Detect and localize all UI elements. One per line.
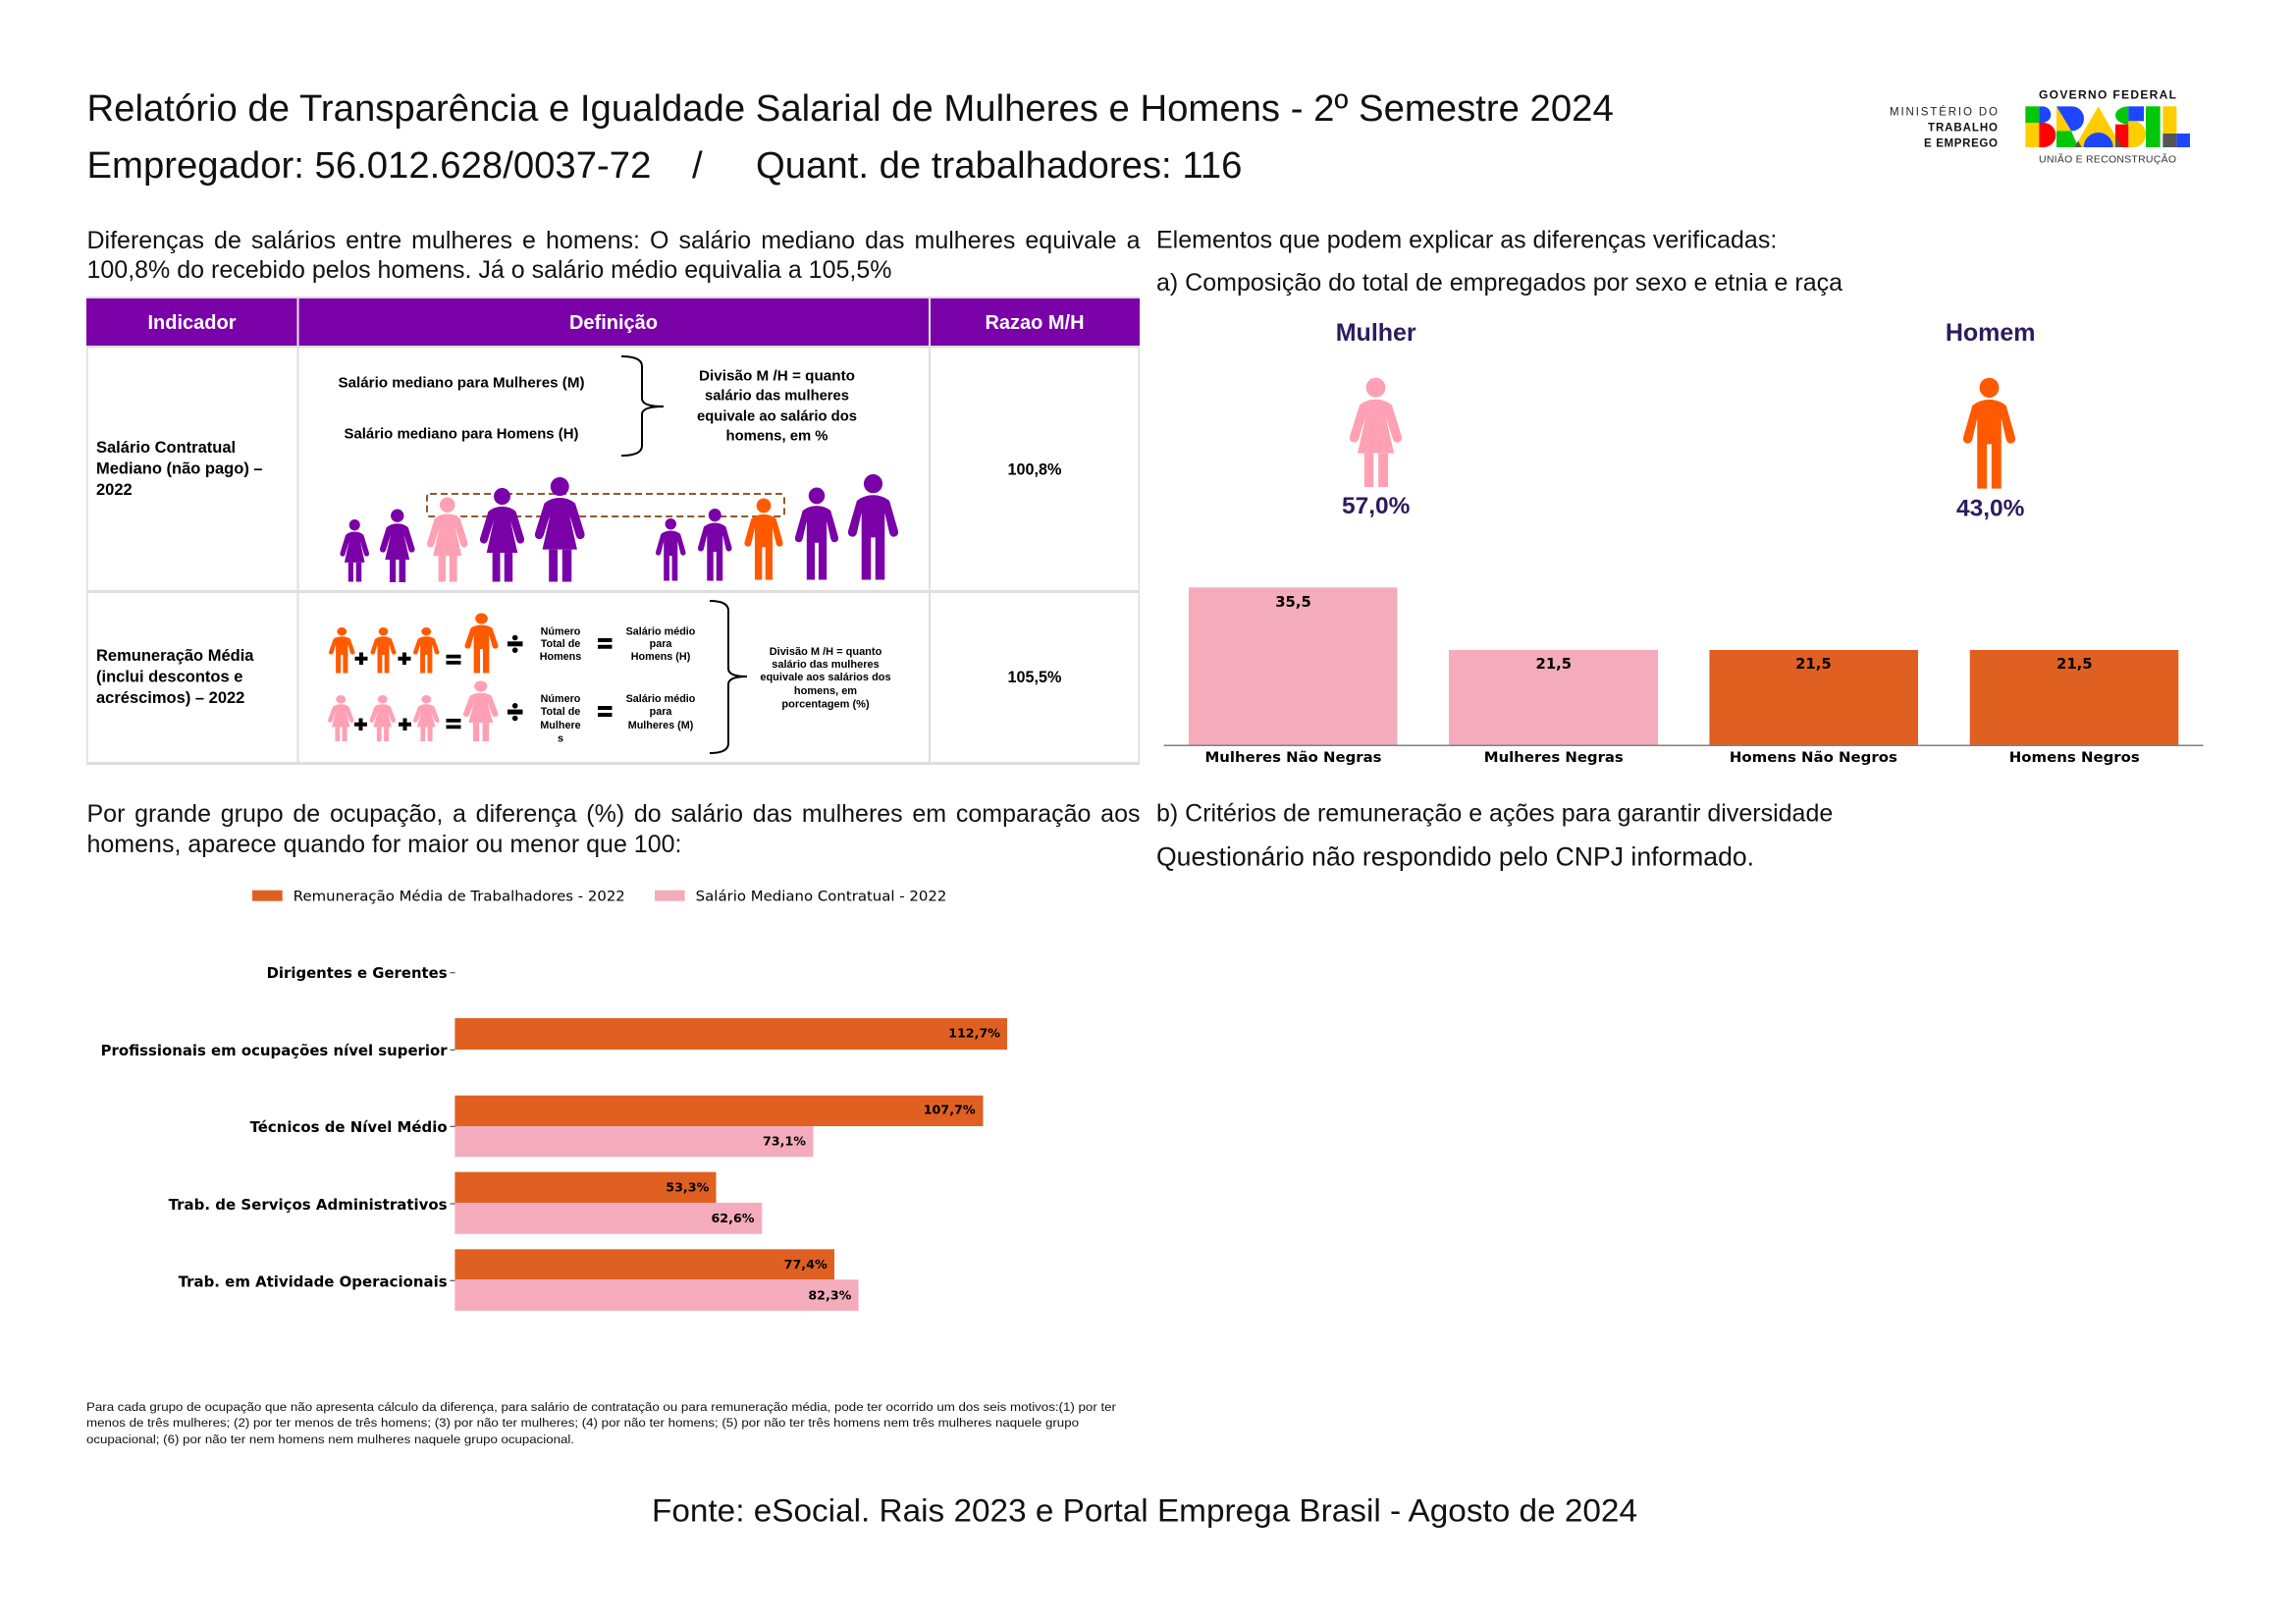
definition: salário mediano formula: Divisão M /H = quanto [699,367,855,385]
title: Empregador: 56.012.628/0037-72 [86,144,651,187]
title: Relatório de Transparência e Igualdade Salarial de Mulheres e Homens - 2º Semestre 2024 [86,87,1614,130]
bar category labels: Homens Negros [2009,750,2140,766]
heading: mulher: Mulher [1336,319,1416,347]
footnote [86,1400,1116,1446]
bar values: 73,1% [763,1134,806,1149]
heading: elementos explicativos: Elementos que podem explicar as diferenças verificadas: [1156,226,1777,253]
row label: salário contratual [96,439,263,499]
panel: indicator table [86,297,1140,765]
row label: salário contratual: 2022 [96,481,133,499]
row label: remuneração média [96,647,254,707]
logo mark: brasil [2025,106,2190,147]
chart legend: Remuneração Média de Trabalhadores - 2022 [294,890,625,905]
definition: salário mediano formula [338,356,857,456]
table header: Razao M/H [985,312,1085,334]
icon: homem [1963,378,2015,489]
definition: salário mediano formula: salário das mulheres [705,387,849,405]
bar values: 77,4% [784,1257,828,1271]
heading: elementos explicativos [1156,226,1842,297]
icons: men average formula: Homens [540,651,581,663]
value: razão remuneração média: 105,5% [1008,669,1061,686]
value: razão salário mediano: 100,8% [1008,461,1061,479]
definition: salário mediano formula: Salário mediano para Mulheres (M) [338,375,585,391]
row label: salário contratual: Salário Contratual [96,439,236,457]
table header [86,297,1140,346]
logo text: união e reconstrução: UNIÃO E RECONSTRUÇÃO [2039,153,2176,165]
icons: men average formula: para [650,638,672,650]
icons: men average formula [329,613,696,674]
bar category labels: Mulheres Não Negras [1205,750,1382,766]
logo: ministério e governo federal [1890,88,2190,165]
table header: Definição [569,312,658,334]
definition: remuneração média division: homens, em [794,685,857,697]
icons: median people line-up [340,474,898,582]
definition: salário mediano formula: Salário mediano para Homens (H) [344,426,579,442]
definition: remuneração média division: equivale aos salários dos [760,672,891,683]
occupation labels: Trab. em Atividade Operacionais [179,1274,448,1290]
bar values [666,1026,1000,1303]
icons: women average formula: Total de [541,706,580,718]
value: mulher percent: 57,0% [1342,493,1411,519]
definition: salário mediano formula: equivale ao salário dos [697,408,857,424]
occupation labels [101,965,448,1290]
footnote: menos de três mulheres; (2) por ter menos de três homens; (3) por não ter mulheres; (4) por não ter homens; (5) por não ter três homens nem três mulheres naquele grupo [86,1416,1079,1430]
heading: homem: Homem [1946,319,2036,347]
bar values: 112,7% [948,1026,1000,1041]
definition: salário mediano formula: homens, em % [726,428,828,444]
bar category labels [1205,750,2140,766]
source line: Fonte: eSocial. Rais 2023 e Portal Emprega Brasil - Agosto de 2024 [652,1492,1637,1528]
bar chart: composição por sexo e raça [1164,587,2204,766]
row label: remuneração média: Remuneração Média [96,647,254,665]
icons: women average formula: para [650,706,672,718]
icons: men average formula: Homens (H) [631,651,691,663]
bars [454,1018,1007,1311]
occupation labels: Dirigentes e Gerentes [267,965,448,982]
icons: men average formula: Total de [541,638,580,650]
icon: mulher [1350,378,1402,487]
definition: remuneração média division: Divisão M /H = quanto [770,646,882,658]
icons: women average formula: Mulhere [540,720,581,731]
occupation labels: Profissionais em ocupações nível superior [101,1043,448,1059]
bar category labels: Homens Não Negros [1730,750,1897,766]
bar values: 21,5 [1536,656,1572,673]
logo text: ministério: E EMPREGO [1924,137,1998,149]
heading: critérios de remuneração: b) Critérios de remuneração e ações para garantir diversidade [1156,799,1833,827]
bar values: 82,3% [808,1288,852,1303]
definition: remuneração média division: porcentagem (%) [781,699,870,711]
table grid [86,346,1140,765]
chart legend: Salário Mediano Contratual - 2022 [696,890,946,905]
title [86,87,1614,187]
bar category labels: Mulheres Negras [1484,750,1624,766]
text block: occupation group intro: Por grande grupo de ocupação, a diferença (%) do salário das mulheres em comparação aos homens, aparece quando for maior ou menor que 100: [86,799,1141,858]
value: homem percent: 43,0% [1956,495,2025,522]
icons: women average formula [328,681,696,744]
definition: remuneração média division [710,601,891,753]
row label: remuneração média: acréscimos) – 2022 [96,689,244,707]
chart legend [252,890,946,905]
footnote: Para cada grupo de ocupação que não apresenta cálculo da diferença, para salário de contratação ou para remuneração média, pode ter ocorrido um dos seis motivos:(1) por ter [86,1400,1116,1414]
icons: men average formula: Número [541,626,581,638]
logo text: governo federal: GOVERNO FEDERAL [2039,88,2176,102]
definition: remuneração média division: salário das mulheres [772,659,880,671]
title: Quant. de trabalhadores: 116 [756,144,1242,187]
bar chart: diferença por grupo de ocupação [101,965,1007,1311]
row label: remuneração média: (inclui descontos e [96,668,242,685]
text block: salary difference intro: Diferenças de salários entre mulheres e homens: O salário mediano das mulheres equivale a 100,8% do recebido pelos homens. Já o salário médio equivalia a 105,5% [86,226,1141,284]
bar values: 35,5 [1275,594,1311,611]
occupation labels: Técnicos de Nível Médio [250,1119,448,1136]
panel: sex composition [1336,319,2036,522]
logo text: ministério: TRABALHO [1928,122,1998,134]
bar values: 53,3% [666,1180,710,1195]
occupation labels: Trab. de Serviços Administrativos [169,1197,448,1214]
title: / [692,144,703,187]
bar values: 62,6% [711,1211,755,1225]
icons: women average formula: Mulheres (M) [628,720,694,731]
icons: women average formula: Número [541,693,581,705]
row label: salário contratual: Mediano (não pago) – [96,460,263,477]
heading: critérios de remuneração: Questionário não respondido pelo CNPJ informado. [1156,842,1754,872]
logo text: ministério [1890,106,1998,149]
icons: women average formula: Salário médio [626,693,696,705]
logo text: ministério: MINISTÉRIO DO [1890,106,1998,118]
footnote: ocupacional; (6) por não ter nem homens nem mulheres naquele grupo ocupacional. [86,1433,574,1446]
bar values: 21,5 [1795,656,1832,673]
bar values: 21,5 [2056,656,2093,673]
icons: men average formula: Salário médio [626,626,696,638]
heading: elementos explicativos: a) Composição do total de empregados por sexo e etnia e raça [1156,269,1842,297]
icons: women average formula: s [558,732,563,744]
bar values: 107,7% [924,1103,976,1117]
table header: Indicador [147,312,237,334]
bar values [1275,594,2093,673]
heading: critérios de remuneração [1156,799,1833,872]
